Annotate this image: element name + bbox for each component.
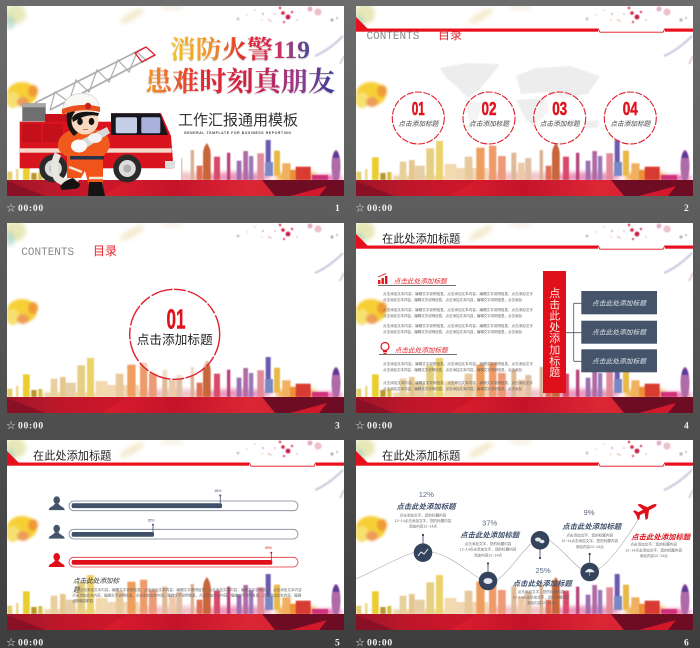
time: 00:00 — [18, 420, 44, 432]
item 04: 04 — [623, 99, 638, 119]
star icon: ☆ — [356, 638, 365, 648]
data label 37%: 12~14点击添加文字，您的标题内容 — [460, 547, 517, 552]
body text block 2: 点击添加文本内容，编辑文字说明信息，点击添加文本内容，编辑文字说明信息，点击添加 — [383, 386, 522, 391]
navy box 2 — [581, 321, 657, 344]
item 01 — [392, 92, 444, 144]
section circle: 点击添加标题 — [137, 333, 213, 347]
data label 12%: 点击添加文字，您的标题内容 — [400, 512, 447, 517]
section circle: 01 — [166, 304, 186, 335]
slide number: 4 — [684, 422, 689, 432]
connector lines — [566, 303, 581, 361]
red vertical title box: 处 — [549, 321, 560, 334]
data label 25%: 点击此处添加标题 — [513, 579, 574, 588]
progress bar 2: 35% — [148, 518, 154, 522]
slide 5 footer — [6, 638, 340, 648]
red vertical title box: 标 — [549, 354, 560, 368]
skyline — [356, 357, 692, 400]
red label: 12~14点击添加文字，您的标题内容 — [625, 547, 683, 552]
bottom band — [356, 180, 693, 196]
star icon: ☆ — [356, 203, 365, 213]
slide 6 footer — [356, 638, 689, 648]
panel: slide 5 progress bars — [4, 438, 344, 630]
bumper — [165, 161, 175, 168]
body text block 2: 点击添加文本内容，编辑文字说明信息，点击添加文本内容，编辑文字说明信息，点击添加文字 — [383, 361, 533, 366]
icon: person 2 — [49, 525, 65, 539]
star icon: ☆ — [6, 638, 16, 648]
star icon: ☆ — [6, 203, 16, 213]
slide number: 3 — [335, 422, 340, 432]
header bar — [356, 17, 693, 32]
hair — [67, 110, 81, 136]
data label 9%: 添加内容12~14点 — [576, 544, 604, 549]
data label 9%: 点击此处添加标题 — [562, 522, 623, 531]
item 02: 点击添加标题 — [469, 120, 510, 128]
bottom band — [7, 614, 344, 630]
slide 1 footer — [6, 203, 340, 214]
red vertical title box: 此 — [549, 310, 560, 323]
item 02: 02 — [482, 99, 496, 119]
panel: slide 6 timeline — [353, 438, 693, 630]
body text block 2: 点击添加文本内容，编辑文字说明信息，点击添加文本内容，编辑文字说明信息，点击添加文字 — [383, 380, 533, 385]
panel: slide 4 hierarchy — [353, 221, 693, 413]
cover title line 1: 消防火警119 — [170, 36, 310, 64]
data label 37%: 点击此处添加标题 — [460, 531, 521, 540]
ladder — [35, 47, 155, 110]
nozzle — [81, 127, 110, 148]
data label 37% — [460, 519, 521, 557]
caption body: 点击添加文本内容，编辑文字说明信息，点击添加文本内容，编辑文字说明信息，点击添加文本内容，编辑文字说明信息，点击添加文本内容 — [80, 587, 302, 592]
subheading 1 — [378, 278, 456, 286]
red vertical title box: 添 — [549, 331, 560, 345]
white stripe — [20, 148, 172, 153]
data label 25%: 12~14点击添加文字，您的标题内容 — [513, 595, 570, 600]
header bar — [7, 451, 344, 466]
data label 12%: 添加内容12~14点 — [409, 524, 437, 529]
slide title: 在此处添加标题 — [33, 449, 111, 463]
body text block 1: 点击添加文本内容，编辑文字说明信息，点击添加文本内容，编辑文字说明信息，点击添加文字 — [383, 323, 533, 328]
tool box — [22, 103, 46, 121]
hose — [54, 154, 77, 182]
panel: slide 1 cover — [4, 4, 344, 196]
heading mulu: 目录 — [93, 244, 117, 258]
data label 9%: 点击添加文字，您的标题内容 — [566, 533, 613, 538]
data label 12% — [395, 490, 457, 529]
skyline — [7, 574, 343, 617]
cover title line 2: 患难时刻真朋友 — [145, 66, 335, 97]
slide number: 1 — [335, 204, 340, 214]
navy box 1: 点击此处添加标题 — [592, 300, 647, 308]
time: 00:00 — [367, 420, 393, 432]
header bar — [356, 234, 693, 249]
bottom band — [356, 397, 693, 413]
item 01: 点击添加标题 — [398, 120, 440, 128]
truck body — [20, 122, 112, 168]
slide 4 footer — [356, 420, 689, 432]
item 01: 01 — [412, 99, 425, 119]
node 1 — [414, 534, 432, 562]
item 03: 点击添加标题 — [540, 120, 581, 128]
data label 9% — [561, 508, 623, 549]
progress bar 3: 89% — [265, 546, 272, 550]
body text block 2: 点击添加文本内容，编辑文字说明信息，点击添加文本内容，编辑文字说明信息，点击添加 — [383, 367, 522, 372]
boots — [60, 178, 80, 190]
world map — [440, 63, 600, 130]
gloves — [71, 140, 87, 152]
wheels — [39, 154, 141, 182]
progress bar 1: 65% — [215, 489, 221, 493]
red vertical title box: 点 — [549, 287, 560, 300]
red vertical title box: 加 — [549, 344, 560, 356]
item 03: 03 — [552, 99, 567, 119]
body text block 1: 点击添加文本内容，编辑文字说明信息，点击添加文本内容，编辑文字说明信息，点击添加文字 — [383, 307, 533, 312]
caption heading: 点击此处添加标 — [73, 577, 120, 585]
heading mulu: 目录 — [438, 28, 462, 42]
data label 37%: 点击添加文字，您的标题内容 — [465, 541, 512, 546]
navy box 3: 点击此处添加标题 — [592, 358, 647, 366]
data label 12%: 12% — [419, 490, 434, 499]
data label 9%: 9% — [584, 508, 595, 517]
caption body: 点击添加文本内容 — [72, 598, 94, 603]
item 04 — [604, 92, 656, 144]
body text block 1: 点击添加文本内容，编辑文字说明信息，点击添加文本内容，编辑文字说明信息，点击添加 — [383, 297, 522, 302]
firefighter character — [54, 93, 110, 196]
bottom band — [7, 397, 344, 413]
wave line — [356, 518, 639, 580]
header bar — [356, 451, 693, 466]
data label 25%: 添加内容12~14点 — [527, 600, 555, 605]
caption body — [72, 587, 302, 603]
fire truck — [20, 47, 175, 182]
red vertical title box: 题 — [549, 366, 560, 379]
item 03 — [534, 92, 586, 144]
cover english caption: GENERAL TEMPLATE FOR BUSINESS REPORTING — [184, 131, 291, 135]
progress bar 2 — [69, 518, 298, 539]
section circle — [130, 289, 220, 379]
skyline — [7, 140, 343, 183]
heading contents: CONTENTS — [366, 31, 420, 43]
progress bar 1 — [69, 489, 298, 511]
node 4 — [580, 553, 599, 581]
data label 25%: 25% — [535, 566, 551, 575]
star icon: ☆ — [6, 420, 16, 430]
subheading 2: 点击此处添加标题 — [395, 347, 449, 355]
progress bar 3 — [69, 546, 298, 567]
subheading 2 — [379, 347, 457, 355]
red label: 点击添加文字，您的标题内容 — [630, 542, 677, 547]
face — [72, 108, 98, 134]
red label: 点击此处添加标题 — [631, 532, 692, 541]
caption body: 点击添加文本内容，编辑文字说明信息，点击添加文本内容，编辑文字说明信息，点击添加文本内容，编辑文字说明信息，点击添加文本内容，编辑 — [72, 592, 302, 598]
slide title: 在此处添加标题 — [382, 232, 460, 246]
torso — [58, 130, 110, 158]
body text block 1: 点击添加文本内容，编辑文字说明信息，点击添加文本内容，编辑文字说明信息，点击添加 — [383, 329, 522, 334]
skyline — [7, 357, 343, 400]
data label 25%: 点击添加文字，您的标题内容 — [518, 589, 565, 594]
node 2 — [479, 562, 497, 590]
caption heading: 题 — [73, 586, 81, 594]
heading contents: CONTENTS — [21, 247, 75, 259]
star icon: ☆ — [356, 420, 365, 430]
navy box 1 — [581, 291, 657, 314]
time: 00:00 — [367, 203, 393, 214]
panel: slide 3 section — [4, 221, 344, 413]
slide number: 2 — [684, 204, 689, 214]
body text block 1 — [383, 291, 533, 334]
legs — [67, 156, 103, 186]
skyline — [356, 574, 692, 617]
data label 12%: 点击此处添加标题 — [396, 502, 457, 511]
icon: bar chart — [378, 274, 387, 284]
cover subtitle: 工作汇报通用模板 — [178, 111, 298, 129]
icon: person 1 — [49, 496, 65, 510]
red vertical title box: 击 — [549, 298, 560, 311]
caption heading — [73, 577, 120, 594]
slide 3 footer — [6, 420, 340, 432]
body text block 1: 点击添加文本内容，编辑文字说明信息，点击添加文本内容，编辑文字说明信息，点击添加文字 — [383, 291, 533, 296]
skyline — [356, 140, 692, 183]
slide title: 在此处添加标题 — [382, 449, 460, 463]
red label — [625, 532, 692, 558]
bottom band — [7, 180, 344, 196]
data label 37%: 37% — [482, 519, 498, 528]
body text block 2 — [383, 361, 533, 391]
icon: airplane — [632, 497, 660, 523]
node 3 — [531, 531, 549, 559]
data label 37%: 添加内容12~14点 — [474, 552, 502, 557]
navy box 3 — [581, 349, 657, 372]
slide 2 footer — [356, 203, 689, 214]
helmet — [62, 93, 100, 113]
red label: 添加内容12~14点 — [640, 553, 668, 558]
body text block 1: 点击添加文本内容，编辑文字说明信息，点击添加文本内容，编辑文字说明信息，点击添加 — [383, 313, 522, 318]
item 02 — [463, 92, 515, 144]
data label 25% — [513, 566, 574, 605]
cover mask behind truck — [44, 131, 181, 180]
time: 00:00 — [18, 203, 44, 214]
truck cab — [111, 113, 173, 168]
item 04: 点击添加标题 — [610, 120, 652, 128]
data label 12%: 12~14点击添加文字，您的标题内容 — [395, 518, 452, 523]
red vertical title box — [543, 271, 566, 393]
icon: light bulb — [381, 342, 389, 353]
subheading 1: 点击此处添加标题 — [394, 278, 448, 286]
data label 9%: 12~14点击添加文字，您的标题内容 — [561, 538, 619, 543]
panel: slide 2 contents — [353, 4, 693, 196]
bottom band — [356, 614, 693, 630]
navy box 2: 点击此处添加标题 — [592, 328, 647, 336]
icon: person 3 — [49, 553, 65, 567]
